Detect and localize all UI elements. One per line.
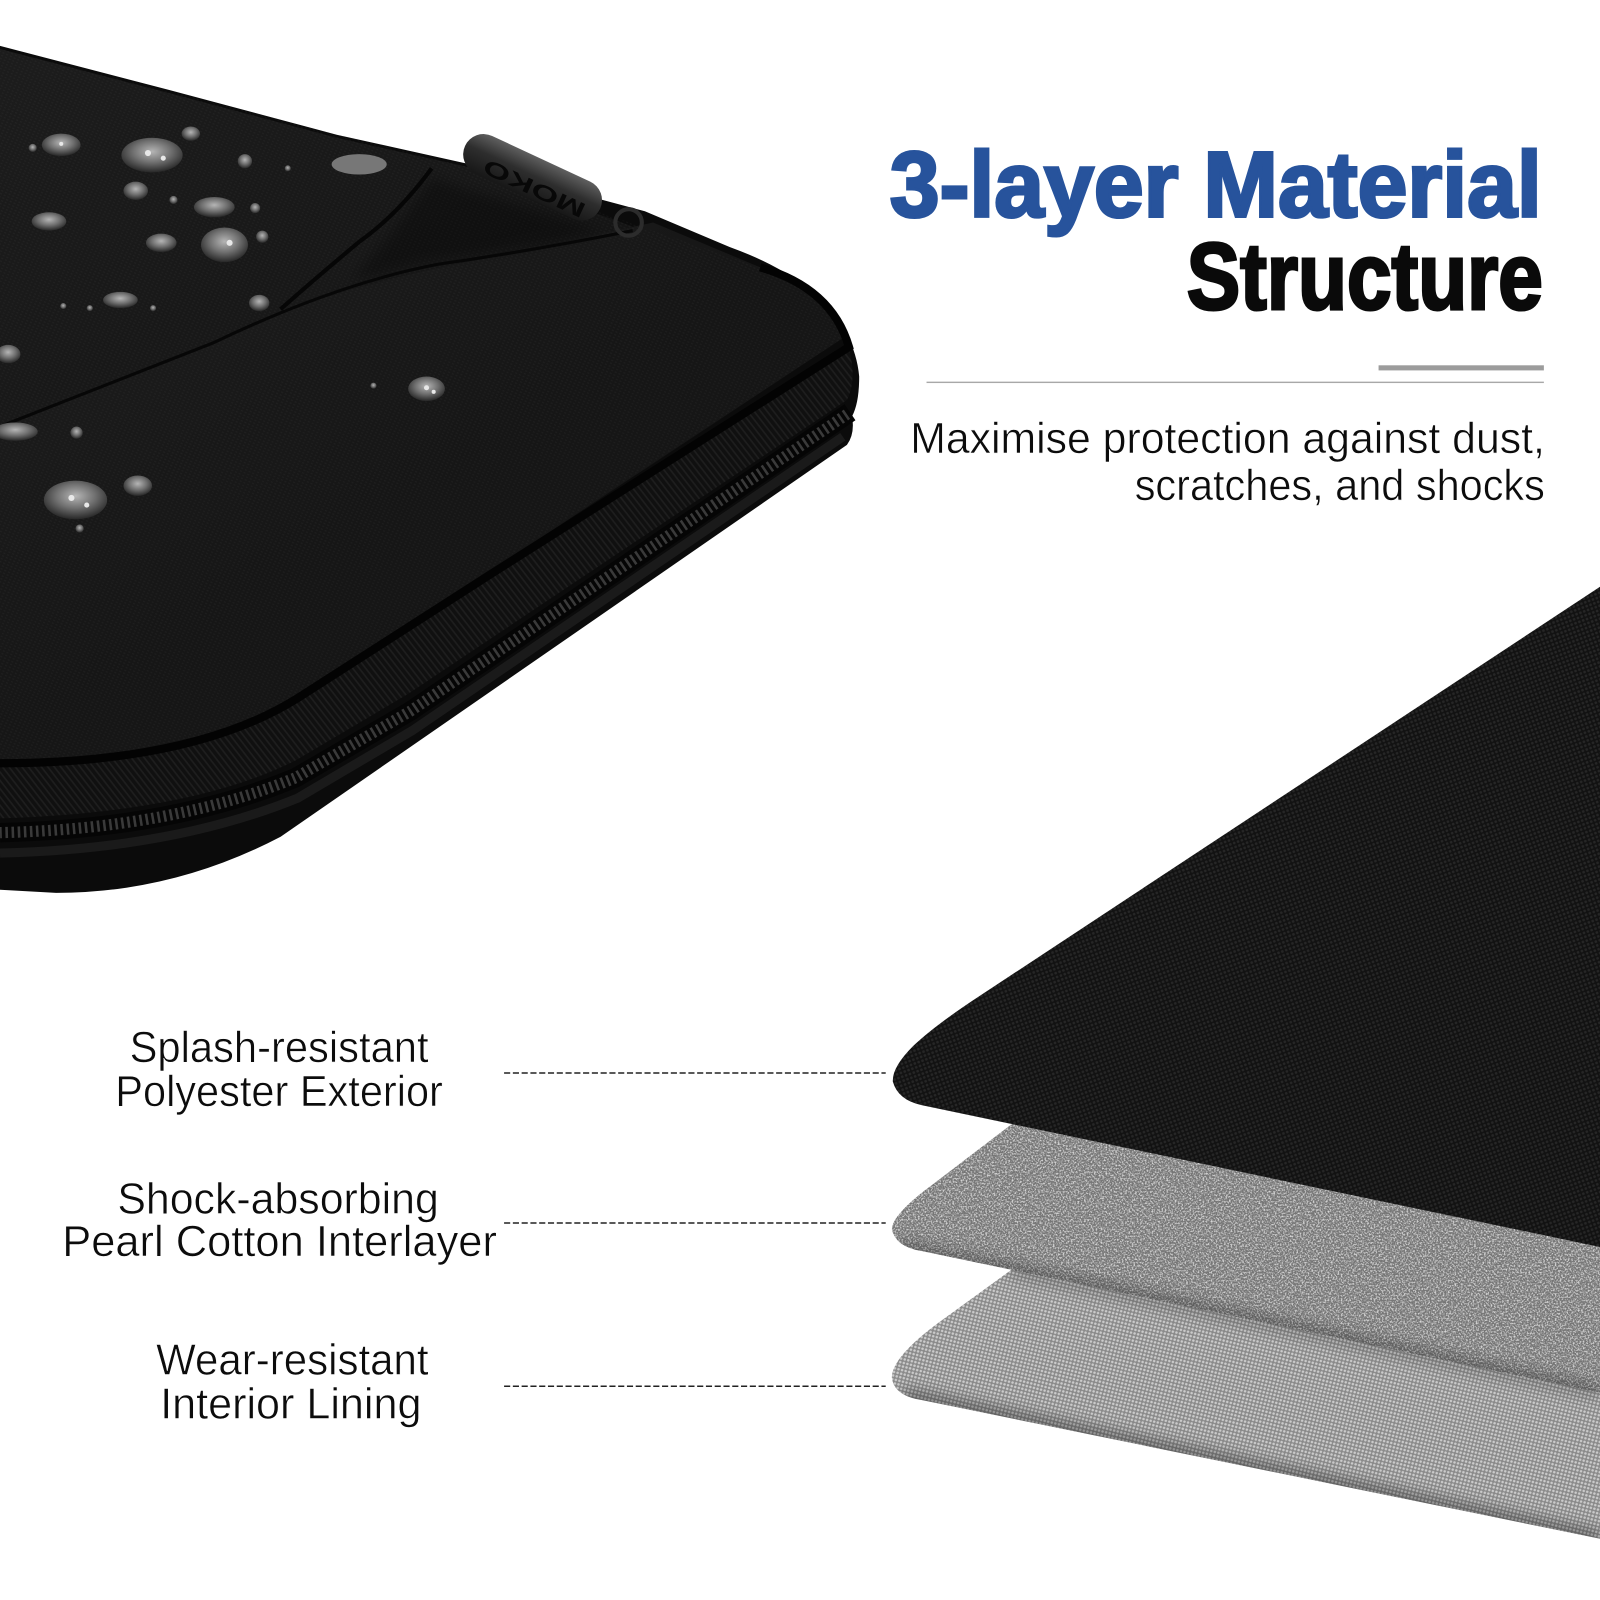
sleeve silhouette [0, 46, 859, 893]
zipper base [0, 412, 850, 833]
title line 1: 3-layer Material [890, 132, 1542, 236]
label: lining [156, 1335, 429, 1428]
leader line: lining [504, 1385, 886, 1387]
pocket crease [281, 168, 432, 309]
interlayer label line 2: Pearl Cotton Interlayer [62, 1217, 497, 1266]
description line 2: scratches, and shocks [1135, 461, 1545, 510]
fabric texture [0, 49, 845, 760]
label: exterior layer [115, 1023, 443, 1116]
soft shadow on foam edge [898, 1247, 1600, 1393]
brand text on tag: MOKO [479, 154, 589, 222]
title [890, 132, 1543, 330]
droplet highlights [59, 142, 436, 508]
product photo: laptop sleeve corner [0, 46, 859, 893]
divider line [927, 382, 1544, 383]
zipper teeth [0, 414, 847, 833]
lower tape band [0, 437, 843, 853]
upper pocket panel [0, 49, 633, 429]
main front panel [0, 222, 845, 760]
interlayer label line 1: Shock-absorbing [117, 1174, 439, 1223]
exterior label line 2: Polyester Exterior [115, 1067, 443, 1116]
lining label line 1: Wear-resistant [156, 1335, 429, 1384]
title line 2: Structure [1187, 224, 1543, 330]
divider accent [1379, 365, 1544, 370]
zip tape upper band [0, 349, 853, 818]
zipper pull tag [456, 127, 642, 236]
soft shadows on lining [903, 1270, 1600, 1539]
piping edge [0, 267, 849, 763]
leader line: interlayer [504, 1222, 886, 1224]
material layer: lining [892, 1263, 1600, 1539]
water droplets [0, 127, 445, 533]
label: interlayer [62, 1174, 497, 1266]
material layer: foam interlayer [892, 1117, 1600, 1393]
pocket seam [0, 231, 633, 427]
exterior label line 1: Splash-resistant [130, 1023, 429, 1072]
rivet [332, 154, 387, 174]
leader line: exterior [504, 1072, 886, 1074]
shaded pocket fold [352, 179, 602, 281]
description line 1: Maximise protection against dust, [910, 414, 1545, 463]
description text [910, 414, 1545, 510]
material layer: polyester exterior [893, 587, 1600, 1247]
lining label line 2: Interior Lining [160, 1379, 421, 1428]
